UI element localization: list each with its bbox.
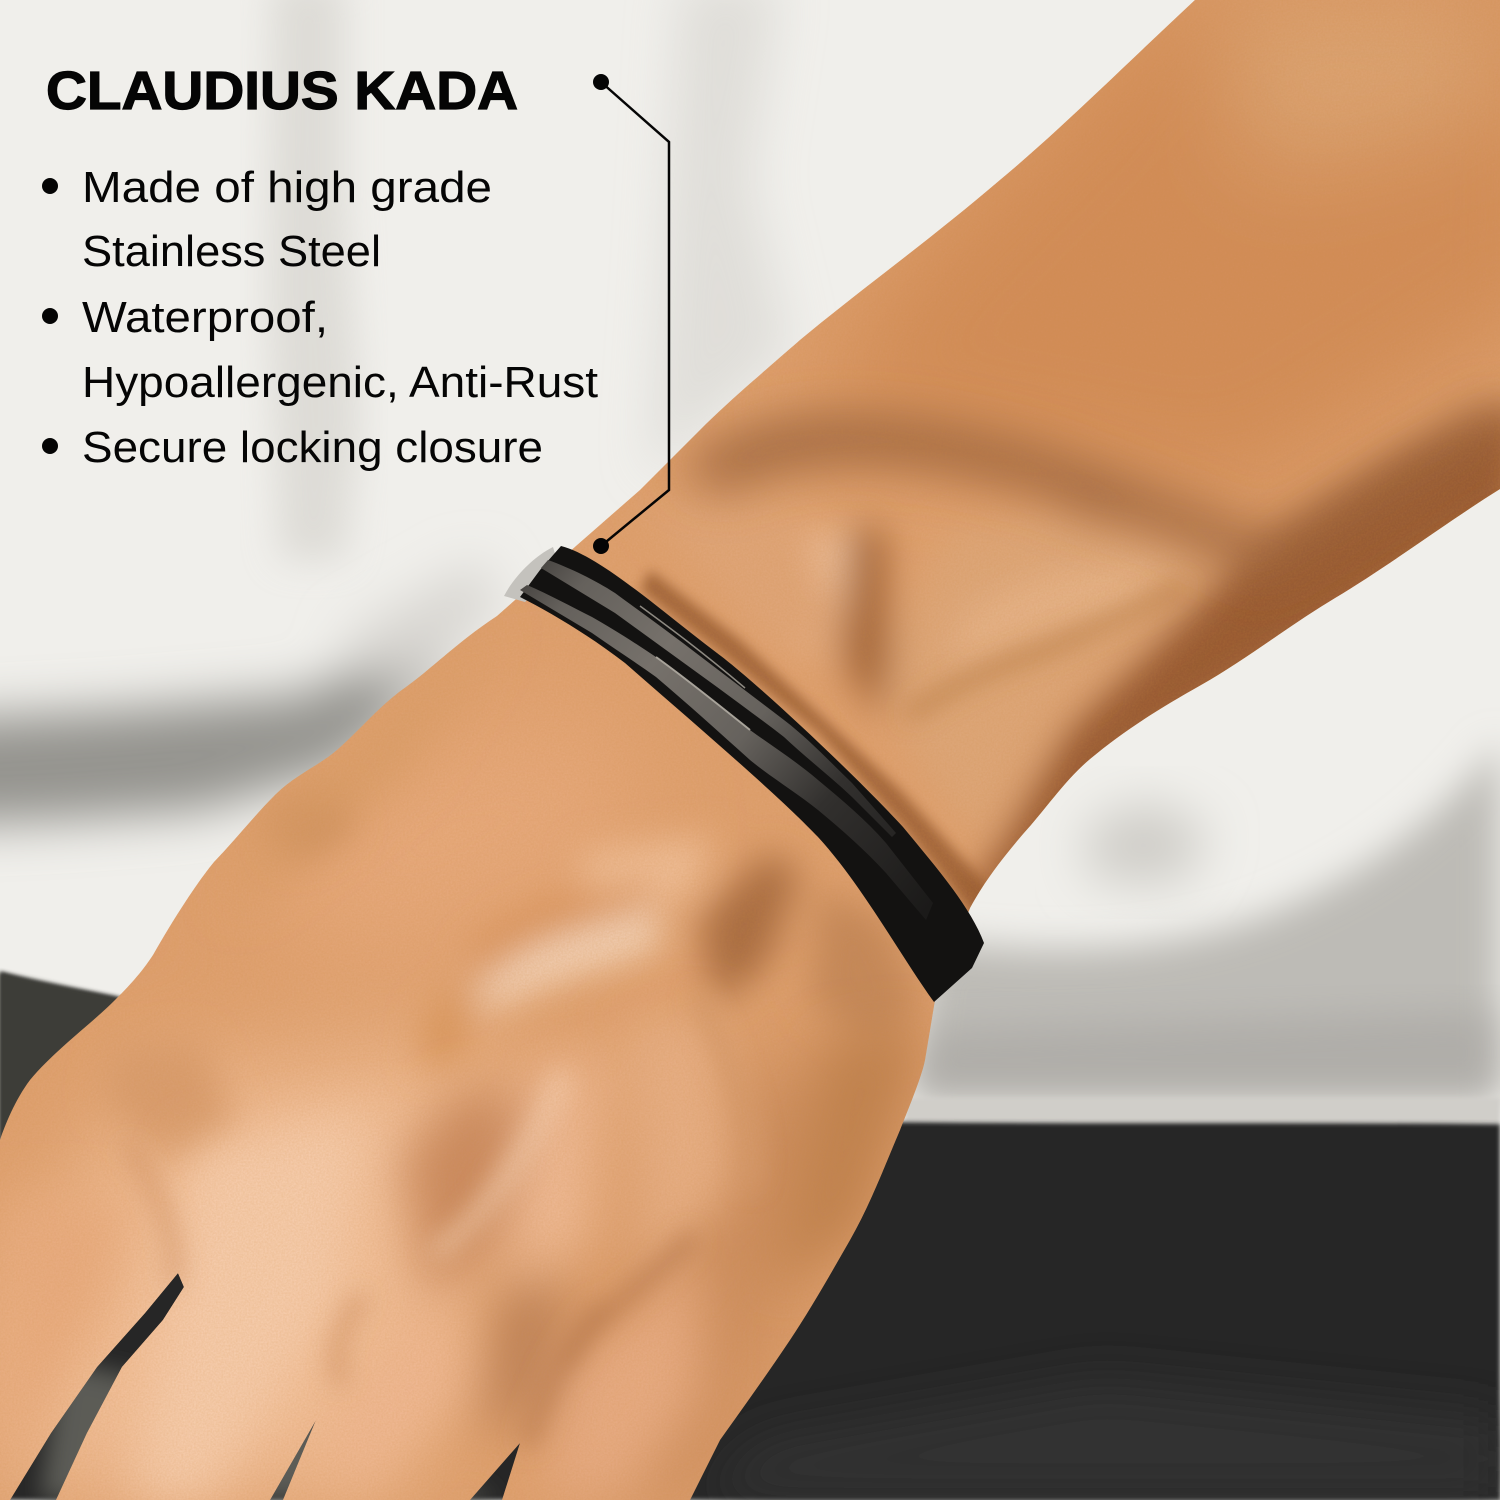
trousers — [0, 972, 1500, 1500]
bottom dot — [593, 538, 609, 554]
upper metal band — [541, 560, 896, 837]
shirt hem — [905, 1098, 1500, 1124]
shadow cast beside bracelet — [640, 570, 1000, 930]
bracelet body — [520, 546, 984, 1002]
callout line with dots — [593, 74, 669, 554]
wrist bright patch — [800, 516, 876, 625]
metal highlights — [656, 657, 750, 730]
feature 1 line 2: Stainless Steel — [82, 227, 381, 276]
feature 2 line 1: Waterproof, — [82, 293, 328, 342]
wrist vein shadow — [840, 525, 892, 720]
feature 3: Secure locking closure — [82, 423, 543, 472]
forearm shadow band — [680, 400, 1500, 580]
title: CLAUDIUS KADA — [46, 61, 518, 121]
hand light and dark — [500, 1050, 600, 1280]
top dot — [593, 74, 609, 90]
feature 2 line 2: Hypoallergenic, Anti-Rust — [82, 358, 598, 407]
feature list — [42, 163, 598, 472]
shirt-side rim shadow along lower arm edge — [960, 400, 1500, 900]
sun patch on wrist — [880, 512, 1224, 845]
vertical shirt folds — [268, 0, 360, 560]
horizontal grey shadow band on shirt — [0, 640, 450, 825]
bracelet — [504, 546, 984, 1002]
feature 1 line 1: Made of high grade — [82, 163, 492, 212]
right lower shirt shadow — [910, 740, 1500, 1100]
lower metal band — [520, 585, 933, 920]
bullet 1 — [42, 178, 58, 194]
hand vein shadows — [700, 853, 800, 1010]
bullet 3 — [42, 438, 58, 454]
bullet 2 — [42, 308, 58, 324]
inner end of cuff — [504, 547, 560, 602]
